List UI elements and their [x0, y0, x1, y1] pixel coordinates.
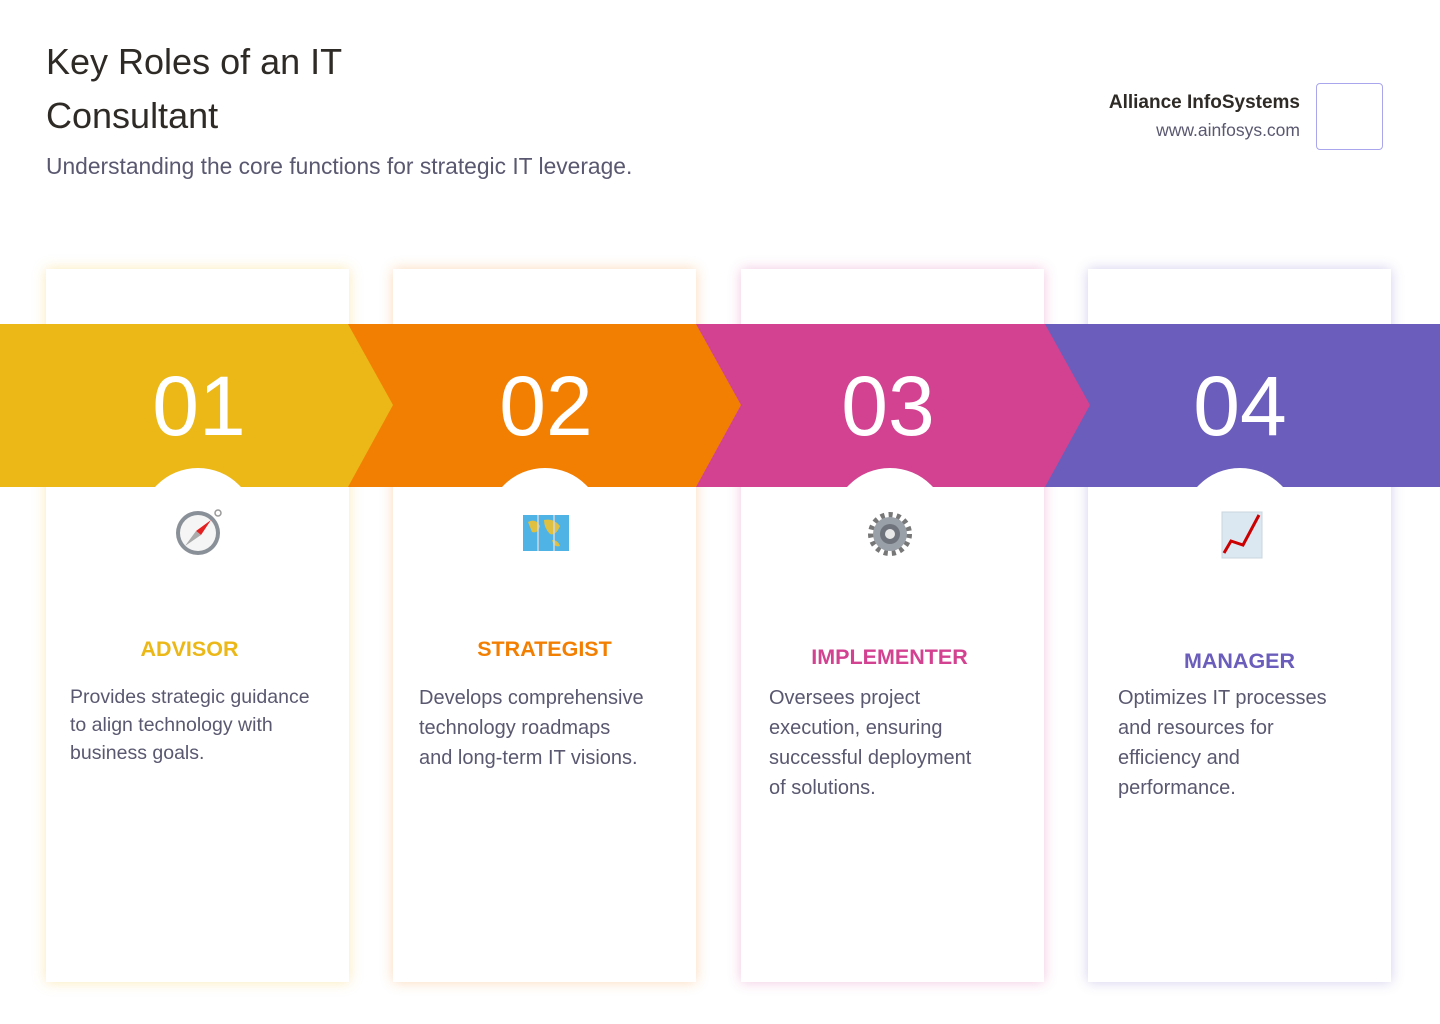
- chevron banner: 03: [841, 359, 935, 453]
- icon: gear: [868, 512, 912, 556]
- text: strategist: technology roadmaps: [419, 717, 610, 739]
- text: implementer: of solutions.: [769, 777, 876, 799]
- brand block: [1109, 92, 1300, 140]
- text: implementer: successful deployment: [769, 747, 971, 769]
- text: strategist: STRATEGIST: [477, 637, 612, 661]
- brand block: www.ainfosys.com: [1156, 120, 1300, 140]
- text: advisor: [70, 637, 310, 764]
- text: manager: performance.: [1118, 777, 1236, 799]
- icon: chart: [1222, 512, 1262, 558]
- text: manager: MANAGER: [1184, 649, 1295, 673]
- card 1: [46, 269, 349, 982]
- icon: compass: [176, 509, 222, 555]
- text: advisor: business goals.: [70, 742, 204, 764]
- subtitle: Understanding the core functions for strategic IT leverage.: [46, 153, 632, 179]
- title: [46, 41, 342, 136]
- text: implementer: Oversees project: [769, 687, 920, 709]
- text: implementer: execution, ensuring: [769, 717, 942, 739]
- text: advisor: to align technology with: [70, 714, 273, 736]
- text: advisor: ADVISOR: [141, 637, 238, 661]
- text: implementer: IMPLEMENTER: [811, 645, 968, 669]
- text: strategist: Develops comprehensive: [419, 687, 644, 709]
- text: strategist: and long-term IT visions.: [419, 747, 638, 769]
- card 2: [393, 269, 696, 982]
- chevron banner: 02: [499, 359, 593, 453]
- text: strategist: [419, 637, 644, 769]
- title: Key Roles of an IT: [46, 41, 342, 82]
- text: implementer: [769, 645, 972, 799]
- text: manager: and resources for: [1118, 717, 1274, 739]
- text: manager: [1118, 649, 1327, 799]
- chevron banner: [0, 324, 1440, 487]
- icon: map: [523, 515, 569, 551]
- brand block: Alliance InfoSystems: [1109, 92, 1300, 113]
- text: advisor: Provides strategic guidance: [70, 686, 310, 708]
- card 3: [741, 269, 1044, 982]
- chevron banner: 04: [1193, 359, 1287, 453]
- text: manager: Optimizes IT processes: [1118, 687, 1327, 709]
- chevron banner: 01: [152, 359, 246, 453]
- text: manager: efficiency and: [1118, 747, 1240, 769]
- logo box: [1316, 83, 1383, 150]
- card 4: [1088, 269, 1391, 982]
- title: Consultant: [46, 95, 218, 136]
